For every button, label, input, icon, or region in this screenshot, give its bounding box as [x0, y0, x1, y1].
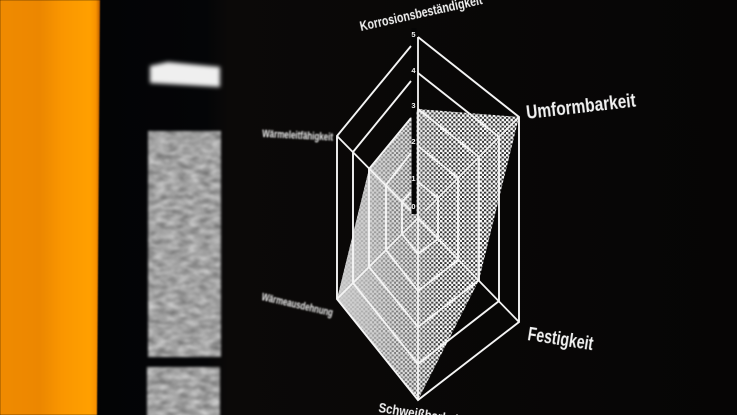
scale numbers: 3 — [411, 101, 416, 110]
label: Wärmeleitfähigkeit: Wärmeleitfähigkeit — [262, 128, 334, 144]
scale numbers — [411, 30, 416, 211]
radar chart — [337, 28, 519, 400]
label: Festigkeit: Festigkeit — [526, 323, 595, 355]
grid rings — [337, 37, 519, 400]
blurred text column, upper block — [148, 131, 221, 357]
label: Wärmeausdehnung: Wärmeausdehnung — [260, 291, 334, 319]
blurred text column, lower block — [147, 367, 220, 415]
scale numbers: 0 — [411, 202, 416, 211]
spokes — [337, 37, 519, 400]
orange band — [0, 0, 100, 415]
scale strip behind numbers — [412, 28, 416, 214]
data area: halftone polygon — [337, 109, 519, 400]
label: Umformbarkeit: Umformbarkeit — [525, 90, 637, 124]
scale numbers: 1 — [411, 174, 416, 183]
scale numbers: 5 — [411, 30, 416, 39]
scale numbers: 2 — [411, 137, 416, 146]
scale numbers: 4 — [411, 66, 416, 75]
blurred heading block — [150, 62, 220, 87]
